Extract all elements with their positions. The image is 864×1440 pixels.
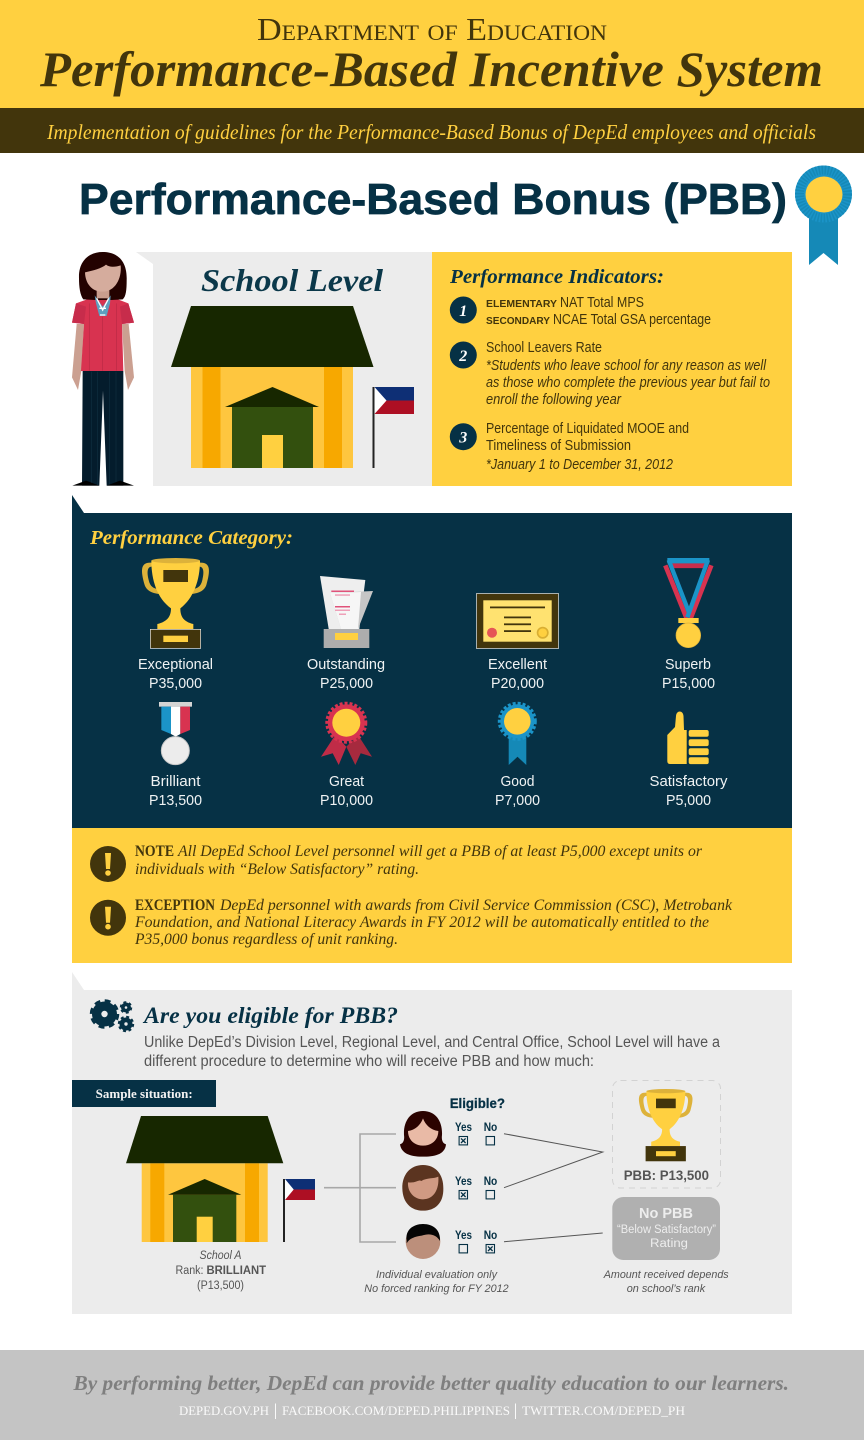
intro text xyxy=(144,1034,720,1070)
icon: trophy xyxy=(142,558,209,648)
indicator 3: *January 1 to December 31, 2012 xyxy=(486,457,673,473)
label: great xyxy=(320,773,373,809)
row 2 checks xyxy=(455,1176,497,1199)
exception callout xyxy=(90,897,733,948)
indicator 2: *Students who leave school for any reason as well xyxy=(486,358,767,374)
row 1 checks: Yes xyxy=(455,1122,472,1134)
indicator 1: SECONDARY xyxy=(486,315,550,327)
school A caption: (P13,500) xyxy=(197,1280,244,1292)
caption: individual evaluation xyxy=(364,1269,509,1295)
label: good: Good xyxy=(500,773,534,790)
panel: notes xyxy=(72,828,792,963)
label: brilliant: Brilliant xyxy=(150,773,201,790)
school A caption xyxy=(176,1250,266,1292)
panel: performance indicators xyxy=(432,252,792,486)
tag: sample situation: Sample situation: xyxy=(96,1087,193,1101)
footer xyxy=(0,1350,864,1440)
intro text: different procedure to determine who will receive PBB and how much: xyxy=(144,1053,594,1070)
icon: gold medal on ribbon xyxy=(665,560,711,648)
row 2 checks: Yes xyxy=(455,1176,472,1188)
exception callout: DepEd personnel with awards from Civil Service Commission (CSC), Metrobank xyxy=(219,897,733,914)
caption: individual evaluation: Individual evaluation only xyxy=(376,1269,498,1281)
icon: gears xyxy=(91,1000,133,1031)
indicator 2 xyxy=(450,340,770,408)
row 3 checks: No xyxy=(484,1230,497,1242)
avatar: man xyxy=(406,1224,440,1259)
caption: amount received: Amount received depends xyxy=(603,1269,729,1281)
school A caption: Rank: xyxy=(176,1265,204,1277)
label: exceptional xyxy=(138,656,213,692)
label: eligible: Eligible? xyxy=(450,1095,505,1111)
icon: trophy small xyxy=(639,1089,693,1161)
icon: Philippine flag xyxy=(372,387,414,468)
main title: Performance-Based Incentive System xyxy=(39,41,823,97)
bracket connector xyxy=(324,1134,396,1242)
row 2 checks: No xyxy=(484,1176,497,1188)
note callout xyxy=(90,843,703,882)
icon: red rosette xyxy=(321,703,372,765)
row 1 checks: No xyxy=(484,1122,497,1134)
icon: silver medal xyxy=(159,702,192,765)
label: superb: P15,000 xyxy=(662,675,715,692)
indicator 2: as those who complete the previous year but fail to xyxy=(486,375,770,391)
label: excellent: P20,000 xyxy=(491,675,544,692)
caption: amount received xyxy=(603,1269,729,1295)
indicator 2: School Leavers Rate xyxy=(486,340,602,356)
icon: certificate xyxy=(476,594,558,648)
outcome: PBB amount xyxy=(612,1080,720,1188)
label: outstanding xyxy=(307,656,385,692)
heading: school level: School Level xyxy=(201,262,383,298)
icon: thumbs up xyxy=(667,712,709,764)
label: good: P7,000 xyxy=(495,792,540,809)
exception callout: P35,000 bonus regardless of unit ranking. xyxy=(134,931,398,948)
exception callout: Foundation, and National Literacy Awards in FY 2012 will be automatically entitled to the xyxy=(134,914,709,931)
indicator 1: NCAE Total GSA percentage xyxy=(553,312,711,328)
note callout: NOTE xyxy=(135,843,174,860)
indicator 2: enroll the following year xyxy=(486,392,622,408)
footer links xyxy=(179,1403,685,1419)
header band xyxy=(0,0,864,108)
indicator 2: 2 xyxy=(458,348,467,365)
heading: PBB: Performance-Based Bonus (PBB) xyxy=(79,175,787,224)
label: great: P10,000 xyxy=(320,792,373,809)
label: exceptional: P35,000 xyxy=(149,675,202,692)
avatar: woman long hair xyxy=(400,1111,446,1157)
indicator 1: NAT Total MPS xyxy=(560,295,644,311)
label: good xyxy=(495,773,540,809)
indicator 3 xyxy=(450,421,689,473)
icon: school A building xyxy=(126,1116,283,1242)
footer links: TWITTER.COM/DEPED_PH xyxy=(522,1403,685,1418)
indicator 1: ELEMENTARY xyxy=(486,298,557,310)
indicator 1 xyxy=(450,295,711,328)
subtitle band xyxy=(0,108,864,153)
label: superb xyxy=(662,656,715,692)
outcome: no PBB: No PBB xyxy=(639,1205,693,1222)
heading: eligible: Are you eligible for PBB? xyxy=(142,1003,398,1028)
label: satisfactory: P5,000 xyxy=(666,792,711,809)
figure: woman in red blouse xyxy=(72,252,134,486)
icon: blue rosette xyxy=(499,703,535,765)
school A caption: School A xyxy=(200,1250,242,1262)
exception callout: EXCEPTION xyxy=(135,897,215,914)
subtitle band: Implementation of guidelines for the Performance-Based Bonus of DepEd employees and officials xyxy=(46,120,816,144)
heading: indicators: Performance Indicators: xyxy=(449,266,664,288)
panel: school level xyxy=(136,252,432,486)
school A caption: BRILLIANT xyxy=(206,1265,266,1277)
indicator 3: Percentage of Liquidated MOOE and xyxy=(486,421,689,437)
intro text: Unlike DepEd’s Division Level, Regional Level, and Central Office, School Level will have a xyxy=(144,1034,720,1051)
indicator 3: Timeliness of Submission xyxy=(486,438,631,454)
caption: individual evaluation: No forced ranking for FY 2012 xyxy=(364,1283,509,1295)
department name: Department of Education xyxy=(257,11,607,47)
icon: glass plaque xyxy=(320,576,373,648)
outcome: PBB amount: PBB: P13,500 xyxy=(624,1168,709,1183)
icon: blue ribbon xyxy=(795,166,852,265)
outcome: no PBB: Rating xyxy=(650,1238,688,1250)
icon: small flag xyxy=(283,1179,315,1242)
row 3 checks xyxy=(455,1230,497,1253)
panel: eligibility xyxy=(72,972,792,1314)
icon: school building xyxy=(171,306,374,468)
footer links: FACEBOOK.COM/DEPED.PHILIPPINES xyxy=(282,1403,510,1418)
connector lines to outcomes xyxy=(504,1134,603,1242)
row 3 checks: Yes xyxy=(455,1230,472,1242)
row 1 checks xyxy=(455,1122,497,1145)
indicator 3: 3 xyxy=(458,430,467,447)
label: brilliant: P13,500 xyxy=(149,792,202,809)
heading: category: Performance Category: xyxy=(89,527,293,549)
note callout: individuals with “Below Satisfactory” rating. xyxy=(135,861,419,878)
outcome: no PBB: “Below Satisfactory” xyxy=(617,1224,716,1236)
label: exceptional: Exceptional xyxy=(138,656,213,673)
avatar: woman brown hair xyxy=(402,1165,443,1211)
label: outstanding: Outstanding xyxy=(307,656,385,673)
label: brilliant xyxy=(149,773,202,809)
footer links: DEPED.GOV.PH xyxy=(179,1403,269,1418)
panel: performance category xyxy=(72,495,792,828)
outcome: no PBB xyxy=(612,1197,720,1260)
tagline: By performing better, DepEd can provide better quality education to our learners. xyxy=(72,1371,789,1395)
caption: amount received: on school’s rank xyxy=(627,1283,706,1295)
note callout: All DepEd School Level personnel will get a PBB of at least P5,000 except units or xyxy=(177,843,703,860)
label: excellent xyxy=(488,656,548,692)
label: superb: Superb xyxy=(665,656,711,673)
label: outstanding: P25,000 xyxy=(320,675,373,692)
label: satisfactory: Satisfactory xyxy=(650,773,728,790)
tag: sample situation xyxy=(72,1080,216,1107)
indicator 1: 1 xyxy=(459,303,467,320)
label: great: Great xyxy=(329,773,365,790)
label: excellent: Excellent xyxy=(488,656,548,673)
label: satisfactory xyxy=(650,773,728,809)
